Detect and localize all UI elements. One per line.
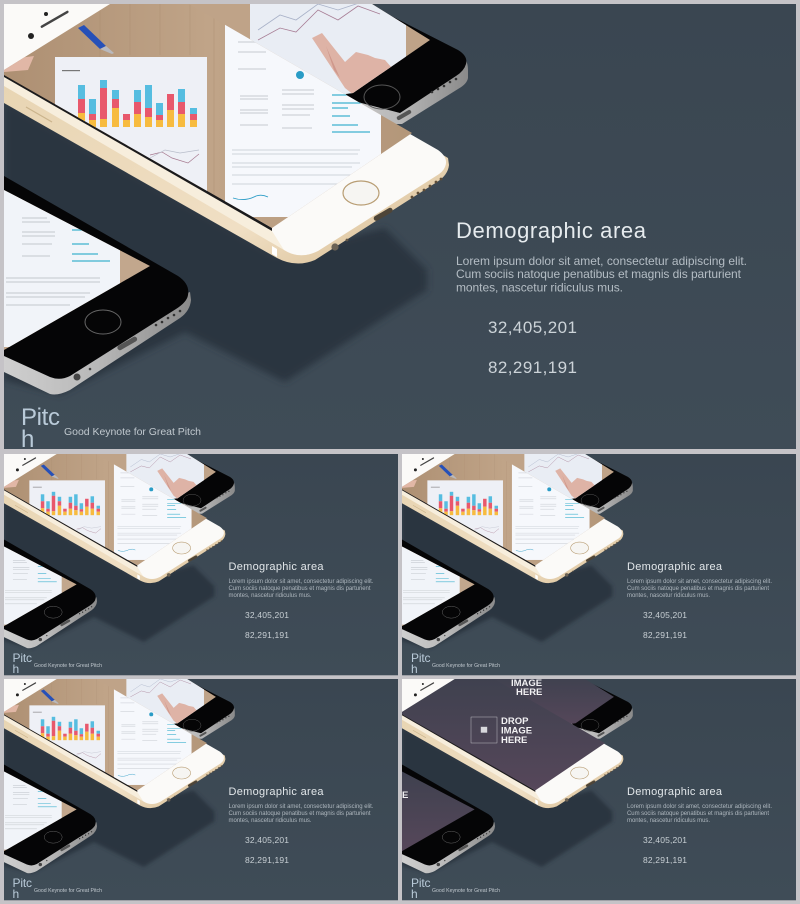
slide text: Cum sociis natoque penatibus et magnis dis parturient: [627, 586, 769, 592]
slide text: h: [411, 662, 418, 676]
slide text: Cum sociis natoque penatibus et magnis dis parturient: [228, 811, 371, 817]
slide text: h: [411, 887, 418, 901]
drop image labels: E: [402, 790, 408, 801]
slide text: [12, 561, 374, 676]
phone mockups: [400, 452, 796, 675]
slide text: 32,405,201: [245, 835, 289, 845]
phone mockups: [2, 452, 398, 675]
statistic values: main slide: [488, 318, 577, 377]
slide text: montes, nascetur ridiculus mus.: [228, 593, 312, 599]
phone mockups with empty screens: [402, 677, 796, 900]
slide text: 82,291,191: [245, 630, 289, 640]
slide text: Lorem ipsum dolor sit amet, consectetur adipiscing elit.: [627, 804, 772, 810]
body text: main slide: montes, nascetur ridiculus mus.: [456, 280, 623, 294]
slide text: Demographic area: [627, 561, 723, 573]
slide text: [411, 561, 772, 676]
slide text: Lorem ipsum dolor sit amet, consectetur adipiscing elit.: [228, 579, 374, 585]
slide text: montes, nascetur ridiculus mus.: [228, 818, 312, 824]
panel: thumbnail slide bottom right with image placeholders: [402, 677, 796, 901]
brand and tagline: main slide: [22, 408, 200, 447]
slide text: Pitc: [12, 651, 32, 665]
phone mockups: main slide: [0, 0, 796, 449]
slide text: h: [12, 887, 19, 901]
panel: main slide: [0, 0, 796, 453]
slide text: h: [12, 662, 19, 676]
slide text: Pitc: [411, 876, 430, 890]
panel: thumbnail slide bottom left: [2, 677, 398, 901]
panel: thumbnail slide top left: [2, 452, 398, 676]
drop image labels: HERE: [516, 687, 542, 698]
slide text: Pitc: [12, 876, 32, 890]
drop image labels: IMAGE: [511, 678, 542, 689]
slide text: 32,405,201: [643, 835, 687, 845]
slide text: Good Keynote for Great Pitch: [432, 663, 500, 669]
slide text: Demographic area: [228, 561, 324, 573]
slide text: Lorem ipsum dolor sit amet, consectetur adipiscing elit.: [228, 804, 374, 810]
drop image labels: DROP: [501, 716, 529, 727]
slide text: Cum sociis natoque penatibus et magnis dis parturient: [627, 811, 769, 817]
brand and tagline: main slide: h: [21, 426, 34, 453]
slide text: Lorem ipsum dolor sit amet, consectetur adipiscing elit.: [627, 579, 772, 585]
slide text: montes, nascetur ridiculus mus.: [627, 818, 710, 824]
body text: main slide: Cum sociis natoque penatibus et magnis dis parturient: [456, 267, 742, 281]
brand and tagline: main slide: Pitc: [21, 404, 60, 431]
slide text: Cum sociis natoque penatibus et magnis dis parturient: [228, 586, 371, 592]
slide text: montes, nascetur ridiculus mus.: [627, 593, 710, 599]
body text: main slide: Lorem ipsum dolor sit amet, consectetur adipiscing elit.: [456, 254, 747, 268]
slide text: 82,291,191: [643, 630, 687, 640]
statistic values: main slide: 82,291,191: [488, 358, 577, 377]
image placeholder icon: [471, 717, 497, 743]
slide text: Demographic area: [627, 786, 723, 798]
slide text: [411, 786, 772, 901]
slide text: Pitc: [411, 651, 430, 665]
slide text: 32,405,201: [643, 610, 687, 620]
drop image labels: HERE: [501, 735, 527, 746]
panel: thumbnail slide top right: [400, 452, 796, 676]
drop image labels: [402, 678, 542, 801]
slide text: Demographic area: [228, 786, 324, 798]
slide text: Good Keynote for Great Pitch: [432, 888, 500, 894]
brand and tagline: main slide: Good Keynote for Great Pitch: [64, 426, 201, 438]
phone mockups: [2, 677, 398, 900]
heading: main slide: Demographic area: [456, 218, 647, 243]
slide text: 82,291,191: [643, 855, 687, 865]
slide text: Good Keynote for Great Pitch: [34, 663, 102, 669]
slide text: 32,405,201: [245, 610, 289, 620]
slide text: [12, 786, 374, 901]
body text: main slide: [456, 254, 747, 294]
statistic values: main slide: 32,405,201: [488, 318, 577, 337]
slide text: Good Keynote for Great Pitch: [34, 888, 102, 894]
drop image labels: IMAGE: [501, 726, 532, 736]
slide text: 82,291,191: [245, 855, 289, 865]
